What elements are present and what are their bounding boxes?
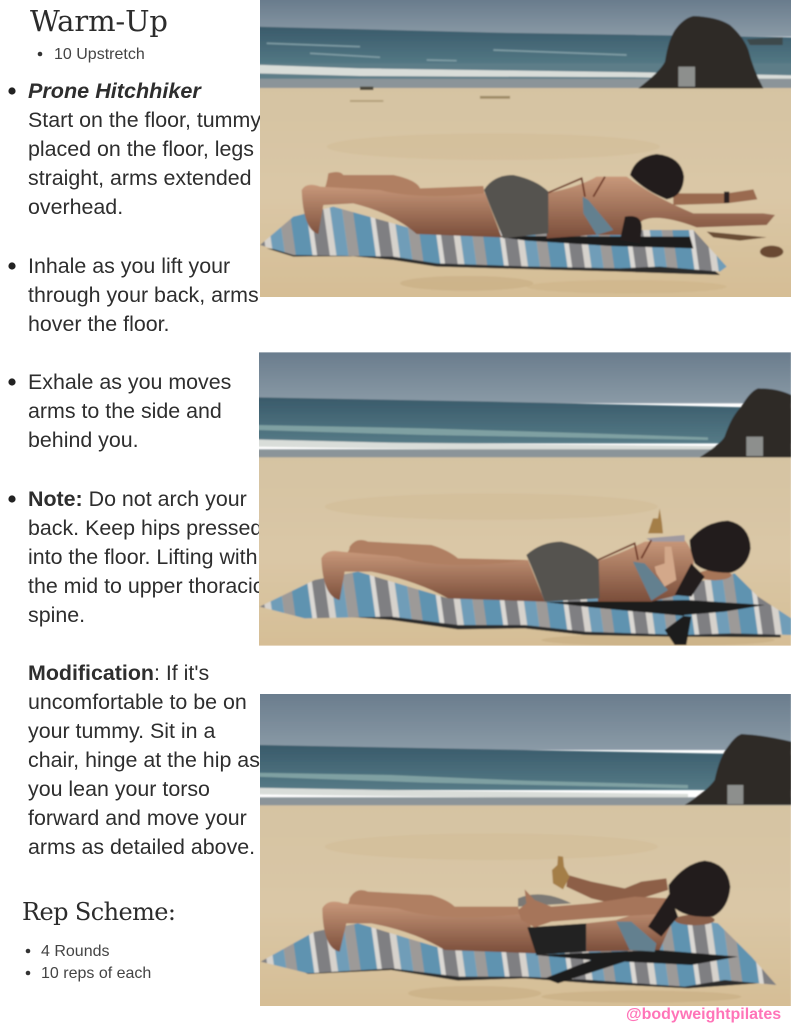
photo 2: arms moving to the side	[255, 347, 791, 654]
modification: uncomfortable to be on	[28, 690, 247, 714]
blanket	[260, 207, 727, 272]
rock	[685, 734, 791, 805]
modification: Modification: If it's	[28, 661, 209, 685]
note: the mid to upper thoracic	[28, 574, 264, 598]
photo 3: arms behind the body	[255, 687, 791, 1012]
blanket	[260, 572, 791, 635]
near leg	[302, 185, 502, 237]
exhale step: Exhale as you moves	[28, 370, 231, 394]
far hand	[648, 508, 663, 533]
head and hair	[675, 915, 715, 925]
text column	[8, 4, 264, 982]
inhale step: Inhale as you lift your	[28, 254, 230, 278]
blanket	[261, 917, 776, 987]
note	[8, 487, 264, 627]
blanket shadow	[306, 967, 758, 990]
body shadow	[545, 600, 765, 645]
near leg	[322, 902, 536, 953]
blanket shadow	[356, 616, 782, 638]
far arm and hand	[566, 875, 668, 902]
modification: chair, hinge at the hip as	[28, 748, 260, 772]
torso and near arm	[547, 177, 775, 238]
exercise name and setup: overhead.	[28, 195, 123, 219]
exercise name and setup: Start on the floor, tummy	[28, 108, 261, 132]
exercise name and setup	[8, 78, 261, 219]
exhale step	[8, 370, 231, 452]
modification: your tummy. Sit in a	[28, 719, 216, 743]
blanket shadow	[267, 248, 720, 275]
body shadow	[493, 236, 693, 248]
shorts	[484, 175, 548, 238]
note: back. Keep hips pressed	[28, 516, 262, 540]
warm-up list: 10 Upstretch	[54, 46, 145, 63]
top	[583, 197, 613, 235]
torso	[596, 540, 694, 602]
exercise name and setup: placed on the floor, legs	[28, 137, 254, 161]
shorts	[518, 894, 571, 907]
far leg	[325, 171, 486, 197]
modification: forward and move your	[28, 806, 247, 830]
rep scheme list	[26, 943, 151, 982]
far arm	[673, 189, 757, 205]
photo 1: arms extended overhead	[257, 0, 791, 301]
top	[616, 922, 656, 952]
near arm and hand	[518, 889, 671, 927]
modification: you lean your torso	[28, 777, 210, 801]
inhale step	[8, 254, 259, 336]
far leg	[348, 539, 526, 566]
shorts	[526, 542, 600, 602]
modification: arms as detailed above.	[28, 835, 255, 859]
inhale step: hover the floor.	[28, 312, 170, 336]
near hand on back	[655, 547, 676, 587]
rep scheme list: 10 reps of each	[41, 965, 151, 982]
note: Note: Do not arch your	[28, 487, 247, 511]
torso	[585, 914, 670, 953]
top	[633, 562, 668, 601]
inhale step: through your back, arms	[28, 283, 259, 307]
exercise name and setup: Prone Hitchhiker	[28, 78, 202, 103]
exhale step: arms to the side and	[28, 399, 222, 423]
rock	[700, 388, 791, 457]
exercise name and setup: straight, arms extended	[28, 166, 252, 190]
near leg	[321, 551, 545, 602]
exhale step: behind you.	[28, 428, 139, 452]
hair	[630, 154, 684, 199]
heading: Rep Scheme: Rep Scheme:	[22, 898, 176, 926]
modification	[28, 661, 260, 859]
title: Warm-Up: Warm-Up	[30, 4, 168, 38]
far leg	[346, 890, 521, 922]
head and hair	[698, 570, 731, 580]
rep scheme list: 4 Rounds	[41, 943, 110, 960]
handle credit: @bodyweightpilates	[626, 1006, 781, 1023]
note: spine.	[28, 603, 85, 627]
body shadow	[535, 950, 738, 983]
note: into the floor. Lifting with	[28, 545, 258, 569]
rock	[638, 16, 763, 88]
